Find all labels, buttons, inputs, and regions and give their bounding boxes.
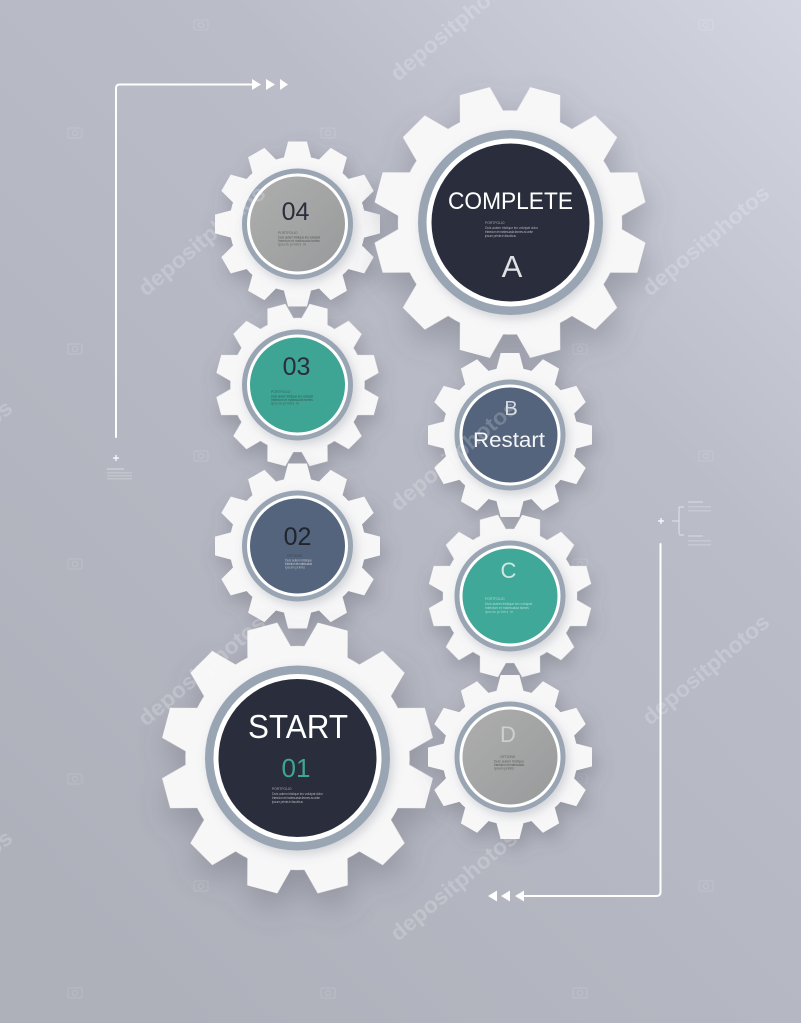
gear 01 START: START <box>248 708 348 745</box>
gear 03 <box>198 285 397 485</box>
watermark text: depositphotos <box>385 825 522 946</box>
gear A COMPLETE: Duis autem tristique leo volutpat dolor <box>485 226 539 230</box>
gear 01 START: Interdum et malesuada fames ac ante <box>272 796 320 800</box>
gear C: Interdum et malesuada fames <box>485 606 529 610</box>
arrow: bottom right bracket <box>488 544 660 902</box>
gear 04: Duis autem tristique leo volutpat <box>278 236 320 240</box>
watermark text: depositphotos <box>637 180 774 301</box>
gear C: PORTFOLIO <box>485 597 505 601</box>
gear 04 <box>215 142 380 306</box>
gear B Restart: B <box>504 398 518 420</box>
gear 02: 02 <box>284 523 311 551</box>
gear 03: ipsum primis in <box>271 402 299 406</box>
gear 04: Interdum et malesuada fames <box>278 239 320 243</box>
gear 03: 03 <box>283 353 310 381</box>
small note: left options <box>107 455 132 480</box>
gear 01 START: Duis autem tristique leo volutpat dolor <box>272 792 324 796</box>
gear B Restart <box>428 353 592 517</box>
gear A COMPLETE: COMPLETE <box>448 188 573 215</box>
gear 02: Interdum et malesuada <box>285 562 312 566</box>
small note: right options branch <box>658 501 711 546</box>
gear 02: Duis autem tristique <box>285 558 312 562</box>
gear 03: Interdum et malesuada fames <box>271 398 313 402</box>
gear A COMPLETE <box>343 56 677 389</box>
gear 02: ipsum primis <box>285 566 305 570</box>
watermark text: depositphotos <box>637 609 774 730</box>
gear D: OPTIONS <box>500 755 516 759</box>
watermark text: depositphotos <box>385 395 522 516</box>
gear C: Duis autem tristique leo volutpat <box>485 602 532 606</box>
gear C: C <box>501 558 517 583</box>
gear A COMPLETE: Interdum et malesuada fames ac ante <box>485 230 533 234</box>
arrow: top left bracket <box>116 79 288 437</box>
gear 01 START: 01 <box>282 753 310 783</box>
gear 01 START: PORTFOLIO <box>272 787 292 791</box>
gear A COMPLETE: PORTFOLIO <box>485 221 505 225</box>
gear D: ipsum primis <box>494 766 514 770</box>
gear D: Interdum et malesuada <box>494 763 524 767</box>
gear 03: Duis autem tristique leo volutpat <box>271 394 313 398</box>
watermark text: depositphotos <box>133 610 270 731</box>
gear 04: 04 <box>282 198 309 226</box>
gear C: ipsum primis in <box>485 610 513 614</box>
gear A COMPLETE: ipsum primis in faucibus <box>485 234 516 238</box>
gear D <box>428 675 592 839</box>
gear 03: PORTFOLIO <box>271 390 291 394</box>
gear 04: ipsum primis in <box>278 242 306 246</box>
gear 02: OPTIONS <box>287 554 303 558</box>
gear B Restart: Restart <box>473 429 545 452</box>
gear 02 <box>215 464 380 628</box>
gear 01 START: ipsum primis in faucibus <box>272 800 303 804</box>
gear 01 START <box>131 591 464 925</box>
gear D: D <box>500 722 516 747</box>
watermark text: depositphotos <box>133 180 270 301</box>
gear 04: PORTFOLIO <box>278 231 298 235</box>
watermark camera icons <box>68 20 713 998</box>
gear C <box>410 496 610 696</box>
gear A COMPLETE: A <box>502 249 523 284</box>
gear D: Duis autem tristique <box>494 760 524 764</box>
